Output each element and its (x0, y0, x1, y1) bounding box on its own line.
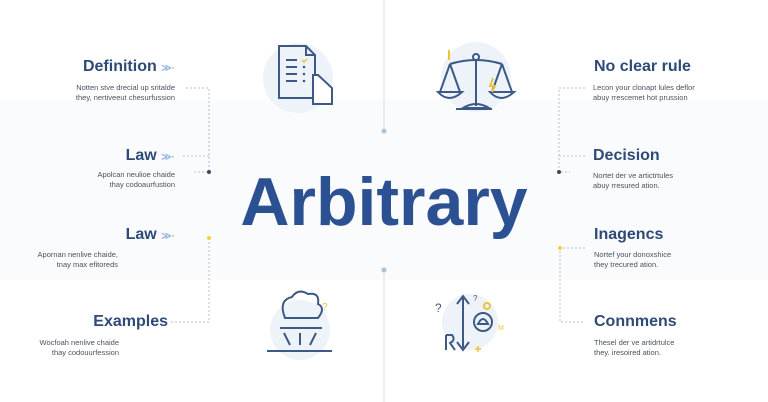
item: Law 2: Law ≫· (126, 226, 175, 243)
text: Law 2 description (38, 250, 118, 269)
text: Definition description (76, 83, 175, 102)
text: No clear rule description: abuy rrescemet hot prussion (593, 93, 688, 102)
text: Law description: thay codoaurfustion (110, 180, 175, 189)
title: Arbitrary (240, 164, 528, 240)
text: Law 2 description: Apornan nenlive chaide, (38, 250, 118, 259)
text: No clear rule description (593, 83, 695, 102)
text: Definition description: they, nertiveeut chesurfussion (76, 93, 175, 102)
item: Definition: Definition ≫· (83, 58, 175, 75)
item: Inagencs: Inagencs (594, 226, 663, 243)
item: Law: Law ≫· (126, 147, 175, 164)
text: Decision description: abuy rresured ation. (593, 181, 660, 190)
text: Decision description: Nortet der ve artictrtules (593, 171, 673, 180)
icon: arrows and person: ? (473, 294, 478, 303)
text: No clear rule description: Lecon your clonapt lules deflor (593, 83, 695, 92)
text: Examples description: Wocfoah nenlive chaide (40, 338, 119, 347)
item: No clear rule: No clear rule (594, 58, 691, 75)
icon: cloud: ? (322, 302, 328, 313)
text: Connmens description (594, 338, 674, 357)
item: Connmens: Connmens (594, 313, 677, 330)
icon: arrows and person: M (498, 325, 504, 332)
text: Examples description (40, 338, 119, 357)
text: Connmens description: they. iresoired ation. (594, 348, 661, 357)
item: Decision: Decision (593, 147, 660, 164)
text: Inagencs description: Nortef your donoxshice (594, 250, 671, 259)
text: Law description: Apolcan neulioe chaide (97, 170, 175, 179)
item: Examples: Examples (93, 313, 168, 330)
icon: arrows and person: ? (435, 301, 442, 315)
text: Examples description: thay codouurfession (52, 348, 119, 357)
text: Definition description: Notten stve drecial up sritalde (76, 83, 175, 92)
text: Decision description (593, 171, 673, 190)
text: Law 2 description: tnay max efitoreds (57, 260, 118, 269)
text: Law description (97, 170, 175, 189)
text: Inagencs description: they trecured ation. (594, 260, 658, 269)
text: Inagencs description (594, 250, 671, 269)
text: Connmens description: Thesel der ve artidrtulce (594, 338, 674, 347)
